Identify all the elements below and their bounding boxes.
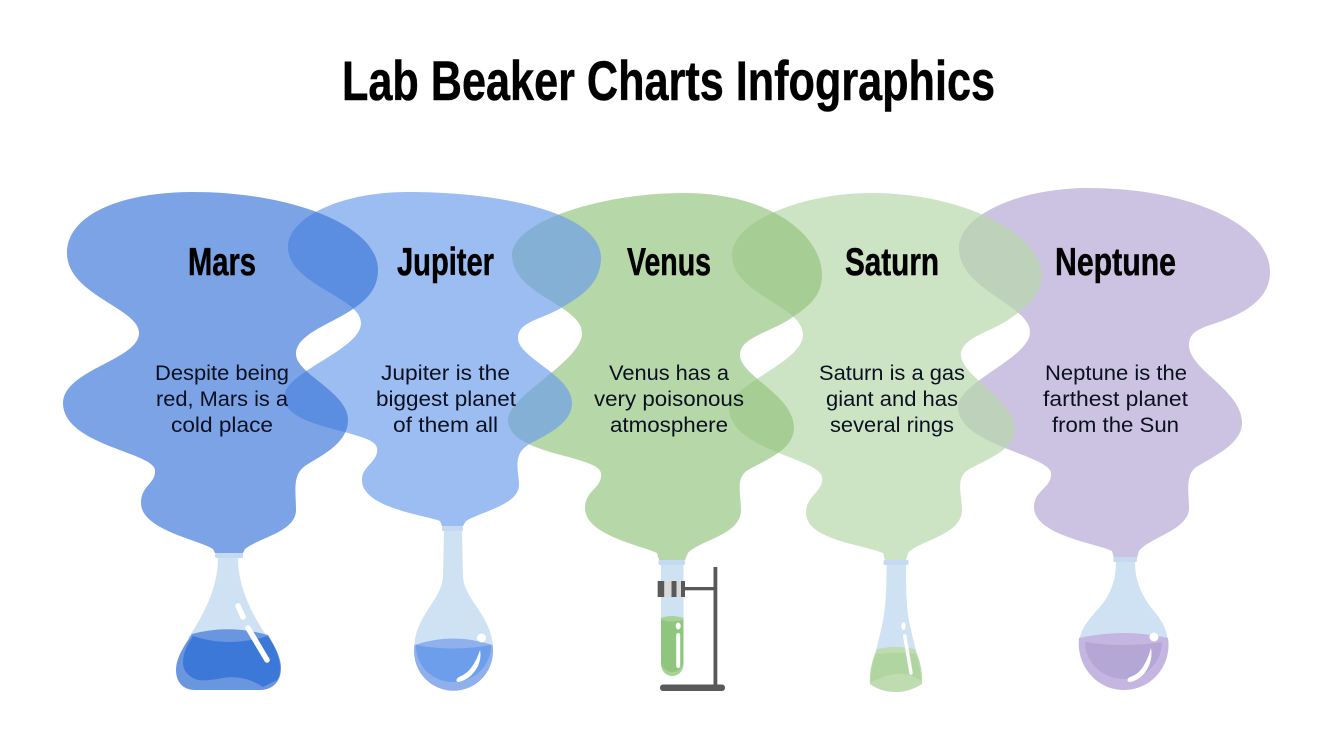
text: venus: atmosphere bbox=[610, 413, 728, 437]
icon: jupiter round flask bbox=[414, 526, 493, 691]
text: neptune bbox=[1043, 241, 1188, 437]
text: jupiter: of them all bbox=[393, 413, 498, 437]
text: neptune: Neptune is the bbox=[1045, 361, 1187, 385]
text: saturn: several rings bbox=[830, 413, 954, 437]
icon: saturn long-neck flask bbox=[870, 560, 922, 692]
panel: jupiter liquid cloud bbox=[284, 192, 601, 526]
text: saturn: giant and has bbox=[826, 387, 958, 411]
text: mars: Mars bbox=[188, 241, 256, 284]
panel: neptune liquid cloud bbox=[958, 188, 1270, 558]
text: neptune: farthest planet bbox=[1043, 387, 1188, 411]
text: saturn: Saturn is a gas bbox=[819, 361, 965, 385]
text: saturn bbox=[819, 241, 965, 437]
title: Lab Beaker Charts Infographics bbox=[342, 49, 995, 112]
text: jupiter: Jupiter is the bbox=[381, 361, 510, 385]
panel: venus liquid cloud bbox=[508, 193, 822, 560]
panel: mars liquid cloud bbox=[63, 192, 378, 553]
text: neptune: from the Sun bbox=[1052, 413, 1179, 437]
text: jupiter bbox=[376, 241, 516, 437]
text: venus: Venus has a bbox=[609, 361, 729, 385]
icon: neptune pear flask bbox=[1079, 557, 1169, 690]
text: jupiter: Jupiter bbox=[397, 241, 494, 284]
icon: venus test tube on a stand bbox=[658, 560, 725, 691]
text: saturn: Saturn bbox=[845, 241, 939, 284]
text: mars: Despite being bbox=[155, 361, 289, 385]
text: jupiter: biggest planet bbox=[376, 387, 516, 411]
text: mars bbox=[155, 241, 289, 437]
text: venus: very poisonous bbox=[594, 387, 744, 411]
text: venus bbox=[594, 241, 744, 437]
panel: saturn liquid cloud bbox=[729, 193, 1042, 560]
text: mars: red, Mars is a bbox=[156, 387, 288, 411]
icon: mars conical flask bbox=[176, 553, 281, 690]
text: venus: Venus bbox=[627, 241, 711, 284]
text: neptune: Neptune bbox=[1055, 241, 1176, 284]
text: mars: cold place bbox=[171, 413, 273, 437]
